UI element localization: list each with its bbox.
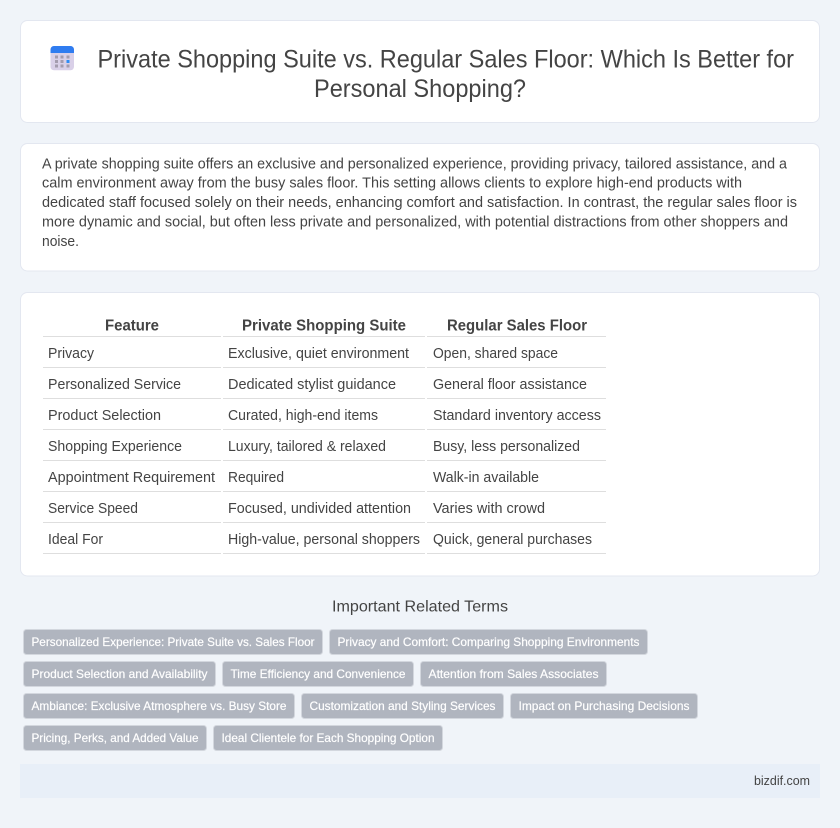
text block: description paragraph: more dynamic and social, but often less private and personalized, with potential distractions from other shoppers and [42,215,788,231]
table row: appointment requirement [48,470,539,486]
tag: privacy and comfort [330,630,648,654]
table row: service speed: Service Speed [48,501,138,517]
panel: title card [20,20,820,122]
tag: product selection: Product Selection and Availability [32,667,208,681]
table row: service speed: Focused, undivided attention [228,501,411,517]
tag: impact on purchasing: Impact on Purchasing Decisions [518,699,690,713]
tag: impact on purchasing [510,694,698,718]
table row: privacy: Open, shared space [433,346,558,362]
title: Private Shopping Suite vs. Regular Sales Floor: Which Is Better for [98,46,794,74]
table row: product selection: Curated, high-end items [228,408,378,424]
tag: attention from sales associates: Attention from Sales Associates [428,667,598,681]
tag: personalized experience: Personalized Experience: Private Suite vs. Sales Floor [32,635,315,649]
text block: description paragraph: calm environment away from the busy sales floor. This setting allows clients to explore high-end products with [42,176,742,192]
table row: privacy: Exclusive, quiet environment [228,346,409,362]
tag: privacy and comfort: Privacy and Comfort: Comparing Shopping Environments [338,635,640,649]
tag: time efficiency: Time Efficiency and Convenience [230,667,406,681]
table header: Feature [105,318,159,335]
table row: service speed [48,501,545,517]
table row: shopping experience: Shopping Experience [48,439,182,455]
table row: ideal for [48,532,592,548]
text block: description paragraph: A private shopping suite offers an exclusive and personalized experience, providing privacy, tailored assistance, and a [42,156,787,172]
table row: service speed: Varies with crowd [433,501,545,517]
panel: comparison table [20,292,820,576]
heading: important related terms: Important Related Terms [332,599,508,616]
table row: shopping experience: Luxury, tailored & relaxed [228,439,386,455]
tag: personalized experience [24,630,322,654]
title [98,46,794,103]
text block: description paragraph: noise. [42,234,79,250]
table row: personalized service: Dedicated stylist guidance [228,377,396,393]
tag: ambiance [24,694,294,718]
tag: product selection [24,662,216,686]
table row: ideal for: High-value, personal shoppers [228,532,420,548]
tag: attention from sales associates [420,662,606,686]
table row: privacy: Privacy [48,346,95,362]
table row: personalized service: Personalized Service [48,377,181,393]
panel: related term tags [24,630,698,750]
table row: privacy [48,346,558,362]
footer: bizdif.com [754,774,810,788]
table row: personalized service [48,377,587,393]
tag: customization: Customization and Styling Services [310,699,496,713]
table row: ideal for: Quick, general purchases [433,532,592,548]
table row: appointment requirement: Required [228,470,284,486]
text block: description paragraph [42,156,797,250]
tag: ideal clientele: Ideal Clientele for Each Shopping Option [222,731,434,745]
table row: product selection [48,408,601,424]
table header: Regular Sales Floor [447,318,587,335]
table row: appointment requirement: Appointment Requirement [48,470,215,486]
panel: description [20,144,820,271]
tag: pricing and perks: Pricing, Perks, and Added Value [32,731,199,745]
table row: shopping experience [48,439,580,455]
table row: ideal for: Ideal For [48,532,103,548]
table row: product selection: Standard inventory access [433,408,601,424]
tag: pricing and perks [24,726,206,750]
table header: Private Shopping Suite [242,318,406,335]
icon: calendar [50,46,74,70]
tag: ideal clientele [214,726,442,750]
table row: appointment requirement: Walk-in available [433,470,539,486]
tag: ambiance: Ambiance: Exclusive Atmosphere vs. Busy Store [32,699,287,713]
table row: shopping experience: Busy, less personalized [433,439,580,455]
tag: customization [302,694,504,718]
table row: personalized service: General floor assistance [433,377,587,393]
text block: description paragraph: dedicated staff focused solely on their needs, enhancing comfort and satisfaction. In contrast, the regular sales floor is [42,195,797,211]
title: Personal Shopping? [314,75,526,103]
footer [20,764,820,798]
table row: product selection: Product Selection [48,408,161,424]
tag: time efficiency [222,662,414,686]
table header [105,318,587,335]
